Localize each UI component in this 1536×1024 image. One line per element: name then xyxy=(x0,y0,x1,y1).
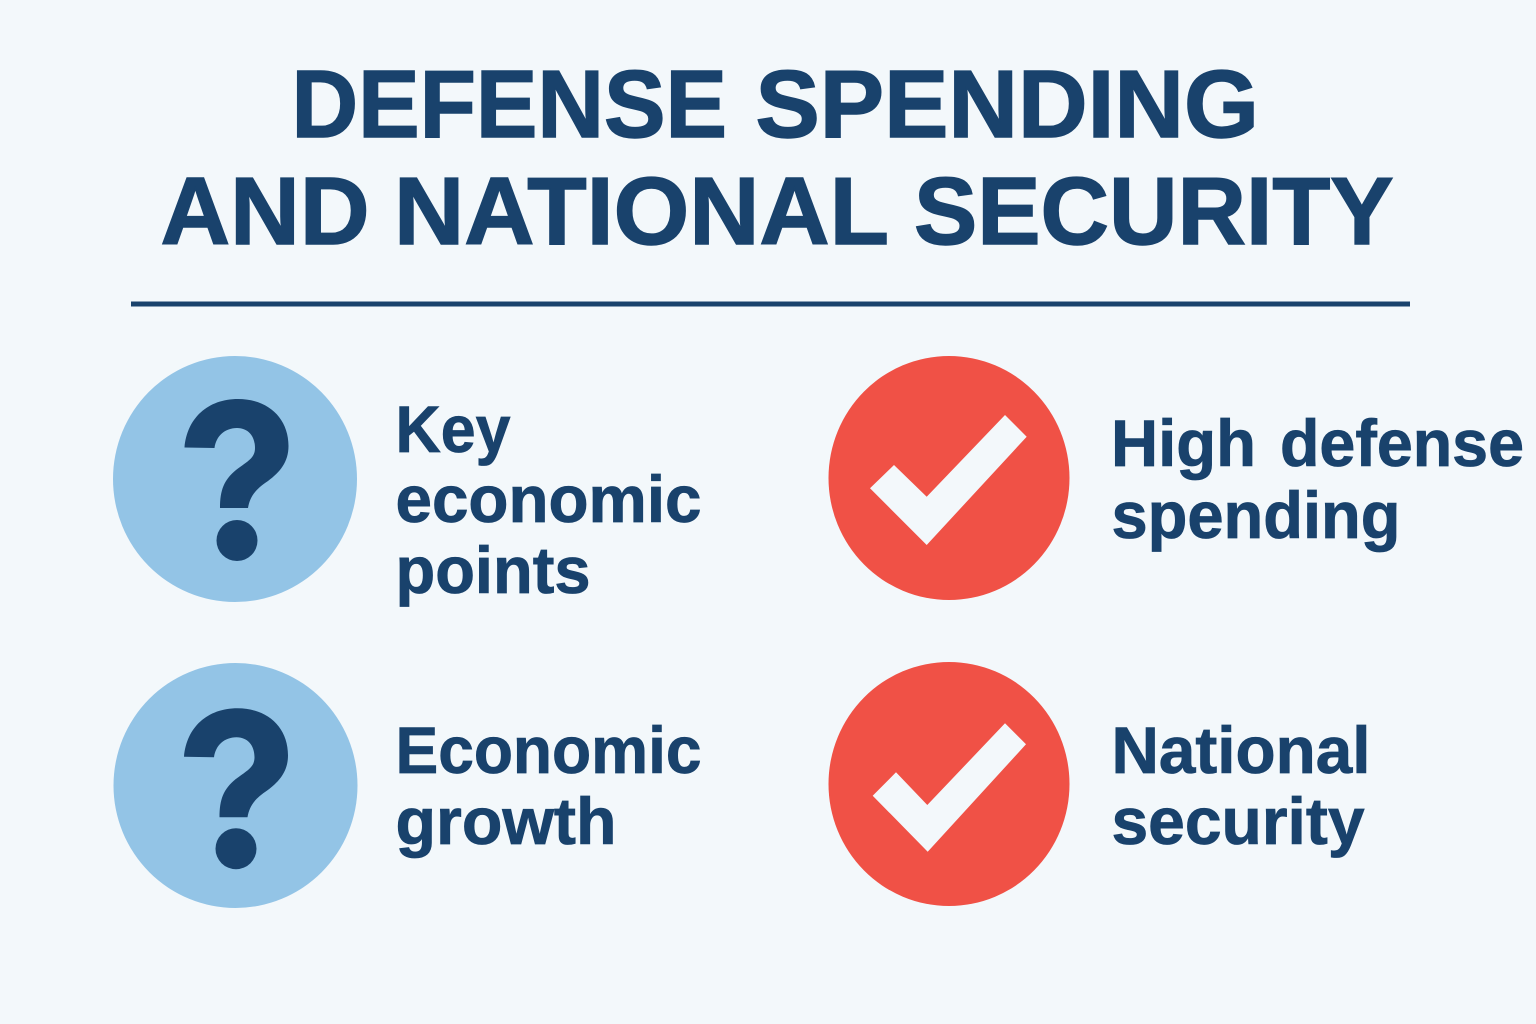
title: SECURITY xyxy=(914,158,1394,265)
icon: question mark in blue circle xyxy=(113,356,357,602)
label: national security xyxy=(1112,713,1370,858)
item: economic growth xyxy=(114,663,702,908)
label: key economic points xyxy=(396,392,702,607)
label: economic growth: growth xyxy=(396,784,616,858)
item: high defense spending xyxy=(828,356,1524,600)
label: key economic points: Key xyxy=(396,392,511,466)
label: key economic points: points xyxy=(396,533,590,607)
title: DEFENSE xyxy=(292,51,727,158)
icon: question mark in blue circle xyxy=(114,663,358,908)
label: high defense spending: spending xyxy=(1112,478,1400,552)
title: NATIONAL xyxy=(394,158,889,265)
label: high defense spending xyxy=(1111,406,1524,552)
item: key economic points xyxy=(113,356,702,607)
title: SPENDING xyxy=(756,51,1259,158)
label: key economic points: economic xyxy=(396,462,702,536)
label: economic growth xyxy=(396,713,702,858)
label: high defense spending: defense xyxy=(1280,406,1524,480)
title xyxy=(160,51,1394,265)
label: high defense spending: High xyxy=(1111,406,1256,480)
label: economic growth: Economic xyxy=(396,713,702,787)
icon: check mark in red circle xyxy=(828,662,1070,906)
label: national security: National xyxy=(1112,713,1370,787)
label: national security: security xyxy=(1112,784,1365,858)
title: AND xyxy=(160,158,370,265)
icon: check mark in red circle xyxy=(828,356,1070,600)
item: national security xyxy=(828,662,1370,906)
